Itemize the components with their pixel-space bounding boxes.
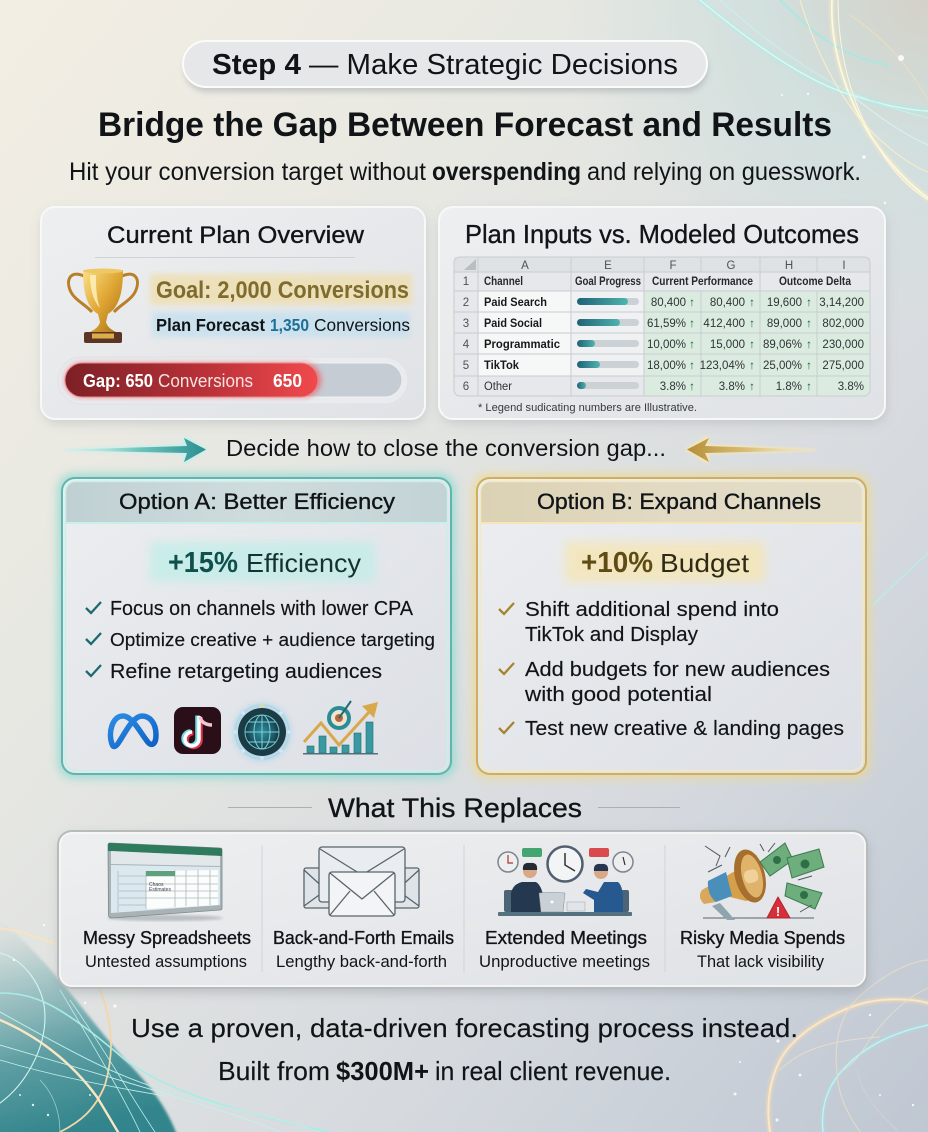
data table: 89,000 <box>767 318 802 330</box>
table legend note: * Legend sudicating numbers are Illustrative. <box>478 402 697 414</box>
data table: TikTok <box>484 360 520 372</box>
option B checklist: Add budgets for new audiences <box>525 659 830 681</box>
icon: spreadsheet: Chaos <box>149 882 164 888</box>
option A checklist <box>86 598 435 683</box>
data table: 3 <box>463 318 469 330</box>
panel: option A <box>58 474 455 778</box>
data table <box>454 257 870 396</box>
option B checklist: Test new creative & landing pages <box>525 718 844 740</box>
data table: 3,14,200 <box>819 297 864 309</box>
option B checklist: Shift additional spend into <box>525 599 779 621</box>
data table: ↑ <box>806 318 812 330</box>
plan forecast highlight: Conversions <box>314 315 410 335</box>
data table: 15,000 <box>710 339 745 351</box>
closing statement: Use a proven, data-driven forecasting process instead. <box>131 1013 798 1043</box>
data table: ↑ <box>806 381 812 393</box>
data table: 3.8% <box>660 381 686 393</box>
data table: Channel <box>484 276 523 288</box>
icon: globe <box>233 703 291 761</box>
item: risky media spends: Risky Media Spends <box>680 928 845 948</box>
data table: E <box>604 260 612 272</box>
data table: 275,000 <box>822 360 864 372</box>
icon: spreadsheet <box>107 843 223 921</box>
step pill <box>183 41 708 92</box>
arrow: teal right <box>65 435 208 465</box>
heading: current plan overview: Current Plan Overview <box>107 222 365 249</box>
data table: ↑ <box>749 318 755 330</box>
data table: A <box>521 260 529 272</box>
icon: meta <box>110 716 156 746</box>
data table: 80,400 <box>710 297 745 309</box>
option B metric <box>565 542 765 582</box>
subtitle: overspending <box>432 158 581 186</box>
data table: Current Performance <box>652 276 753 288</box>
bottom right swirls <box>768 999 928 1132</box>
data table: Outcome Delta <box>779 276 852 288</box>
data table: F <box>669 260 677 272</box>
item: back-and-forth emails: Lengthy back-and-forth <box>276 953 447 971</box>
closing statement: in real client revenue. <box>435 1056 671 1086</box>
data table: Goal Progress <box>575 276 641 288</box>
decision prompt: Decide how to close the conversion gap... <box>226 435 666 461</box>
item: back-and-forth emails: Back-and-Forth Emails <box>273 928 454 948</box>
data table: 80,400 <box>651 297 686 309</box>
option A heading: Option A: Better Efficiency <box>119 489 396 514</box>
icon: tiktok <box>174 707 221 754</box>
data table: H <box>785 260 793 272</box>
item: extended meetings: Extended Meetings <box>485 928 647 948</box>
icon: envelopes <box>304 847 419 916</box>
data table: 412,400 <box>703 318 745 330</box>
option A checklist: Refine retargeting audiences <box>110 661 382 683</box>
panel: what this replaces <box>58 831 867 992</box>
data table: ↑ <box>806 297 812 309</box>
icon: trophy <box>69 268 137 343</box>
data table: 230,000 <box>822 339 864 351</box>
option B checklist <box>499 599 844 740</box>
data table: 2 <box>463 297 469 309</box>
option A checklist: Optimize creative + audience targeting <box>110 629 435 650</box>
item: risky media spends: That lack visibility <box>697 953 825 971</box>
option B heading: Option B: Expand Channels <box>537 489 821 514</box>
data table: 4 <box>463 339 470 351</box>
item: messy spreadsheets: Messy Spreadsheets <box>83 928 251 948</box>
data table: 3.8% <box>838 381 864 393</box>
data table: 123,04% <box>700 360 745 372</box>
data table: 10,00% <box>647 339 686 351</box>
icon: spreadsheet: Estimates <box>149 887 171 893</box>
data table: ↑ <box>749 360 755 372</box>
data table: 1.8% <box>776 381 802 393</box>
plan forecast highlight <box>152 312 410 337</box>
closing statement: $300M+ <box>336 1056 429 1086</box>
data table: 5 <box>463 360 469 372</box>
item: extended meetings <box>479 846 650 971</box>
item: messy spreadsheets <box>83 843 251 971</box>
title: Bridge the Gap Between Forecast and Results <box>98 106 832 144</box>
data table: 802,000 <box>822 318 864 330</box>
goal highlight: Goal: 2,000 Conversions <box>156 277 409 304</box>
panel: current plan overview <box>41 207 425 422</box>
icon: megaphone with cash: ! <box>776 904 780 919</box>
subtitle: Hit your conversion target without <box>69 158 426 186</box>
option B checklist: with good potential <box>524 684 712 706</box>
panel: plan inputs vs modeled outcomes <box>439 207 885 422</box>
gap progress bar: 650 <box>273 371 302 391</box>
item: back-and-forth emails <box>273 847 454 971</box>
data table: ↑ <box>749 297 755 309</box>
data table: Paid Search <box>484 297 547 309</box>
data table: ↑ <box>689 297 695 309</box>
item: risky media spends <box>680 843 845 971</box>
option A metric: Efficiency <box>246 548 361 578</box>
data table: 25,00% <box>763 360 802 372</box>
data table: Programmatic <box>484 339 561 351</box>
data table: 61,59% <box>647 318 686 330</box>
arrow: gold left <box>684 435 816 465</box>
right streak <box>873 553 928 606</box>
bottom left swirls <box>0 928 60 946</box>
closing statement: Built from <box>218 1056 330 1086</box>
data table: ↑ <box>689 381 695 393</box>
data table: ↑ <box>749 381 755 393</box>
top right swirls <box>832 0 928 198</box>
gap progress bar: Gap: 650 <box>83 371 153 391</box>
gap progress bar <box>58 357 408 404</box>
item: extended meetings: Unproductive meetings <box>479 953 650 971</box>
option B metric: Budget <box>660 548 750 578</box>
data table: G <box>727 260 736 272</box>
step pill: Step 4 <box>212 49 301 81</box>
option A metric <box>150 542 375 582</box>
option B metric: +10% <box>581 547 653 579</box>
option A checklist: Focus on channels with lower CPA <box>110 598 414 620</box>
data table: ↑ <box>806 360 812 372</box>
data table: ↑ <box>806 339 812 351</box>
closing statement <box>131 1013 798 1086</box>
data table: 18,00% <box>647 360 686 372</box>
subtitle: and relying on guesswork. <box>587 158 861 186</box>
option A metric: +15% <box>168 547 238 579</box>
heading: what this replaces: What This Replaces <box>328 793 582 823</box>
data table: ↑ <box>689 339 695 351</box>
heading: plan inputs: Plan Inputs vs. Modeled Outcomes <box>465 219 859 249</box>
icon: megaphone with cash <box>700 843 824 920</box>
plan forecast highlight: 1,350 <box>270 315 309 335</box>
data table: 6 <box>463 381 469 393</box>
item: messy spreadsheets: Untested assumptions <box>85 953 247 971</box>
data table: ↑ <box>749 339 755 351</box>
gap progress bar: Conversions <box>158 371 253 391</box>
data table: Paid Social <box>484 318 542 330</box>
data table: Other <box>484 381 512 393</box>
data table: ↑ <box>689 318 695 330</box>
panel: option B <box>473 474 870 778</box>
subtitle <box>69 158 861 186</box>
data table: I <box>842 260 846 272</box>
icon: growth chart with target <box>303 701 378 754</box>
plan forecast highlight: Plan Forecast <box>156 315 265 335</box>
data table: 1 <box>463 276 469 288</box>
data table: 89,06% <box>763 339 802 351</box>
option B checklist: TikTok and Display <box>525 624 698 646</box>
data table: ↑ <box>689 360 695 372</box>
data table: 19,600 <box>767 297 802 309</box>
step pill: — Make Strategic Decisions <box>309 49 678 81</box>
icon: meeting with clocks <box>498 846 633 916</box>
data table: 3.8% <box>719 381 745 393</box>
